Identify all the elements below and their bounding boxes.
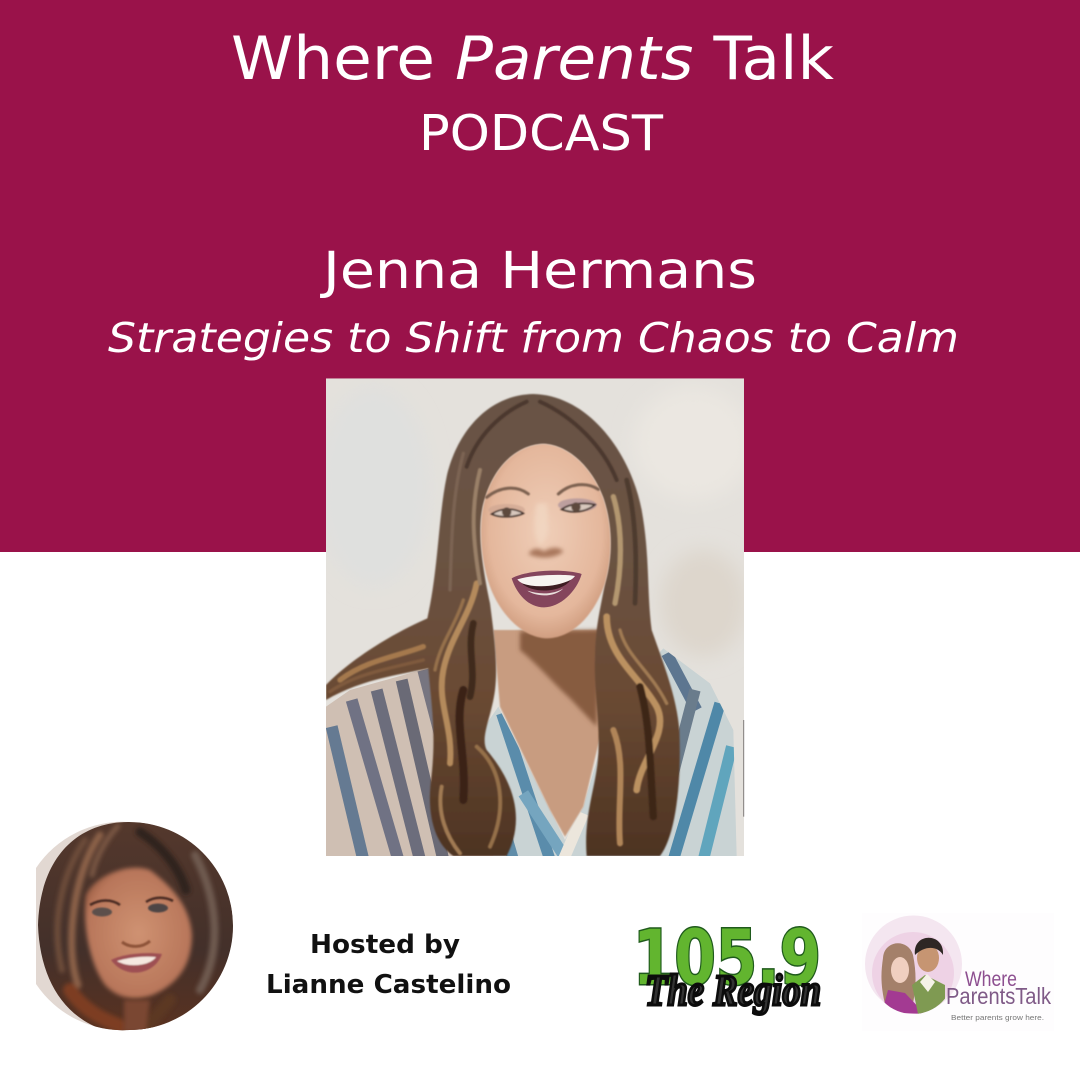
chest (493, 630, 603, 837)
photo edge line (742, 720, 745, 817)
host portrait (36, 822, 233, 1030)
host credit (266, 930, 511, 1000)
header band (0, 0, 1080, 552)
face (481, 444, 610, 638)
title: Where Parents Talk (231, 24, 834, 94)
logo wordmark: The Region (645, 966, 821, 1015)
logo wordmark: Where (965, 968, 1017, 991)
eyes (488, 498, 597, 517)
guest name: Jenna Hermans (320, 242, 757, 301)
nose (528, 503, 563, 558)
subtitle: podcast: PODCAST (419, 105, 664, 162)
hair (326, 394, 680, 856)
shirt left (320, 648, 737, 860)
logo tagline: Better parents grow here. (951, 1013, 1044, 1022)
guest photo (317, 378, 753, 860)
brows (487, 485, 598, 497)
logo number: 105.9 (633, 913, 821, 1002)
logo figures (881, 943, 945, 1014)
hosted by label: Hosted by (310, 930, 460, 960)
episode title: Strategies to Shift from Chaos to Calm (108, 314, 959, 362)
host name: Lianne Castelino (266, 970, 511, 1000)
logo: 105.9 The Region (633, 913, 821, 1015)
host face (85, 868, 192, 998)
host features (90, 898, 173, 973)
logo: Where Parents Talk (865, 916, 1051, 1022)
logo wordmark second line: ParentsTalk (946, 983, 1051, 1009)
smile (512, 571, 582, 607)
